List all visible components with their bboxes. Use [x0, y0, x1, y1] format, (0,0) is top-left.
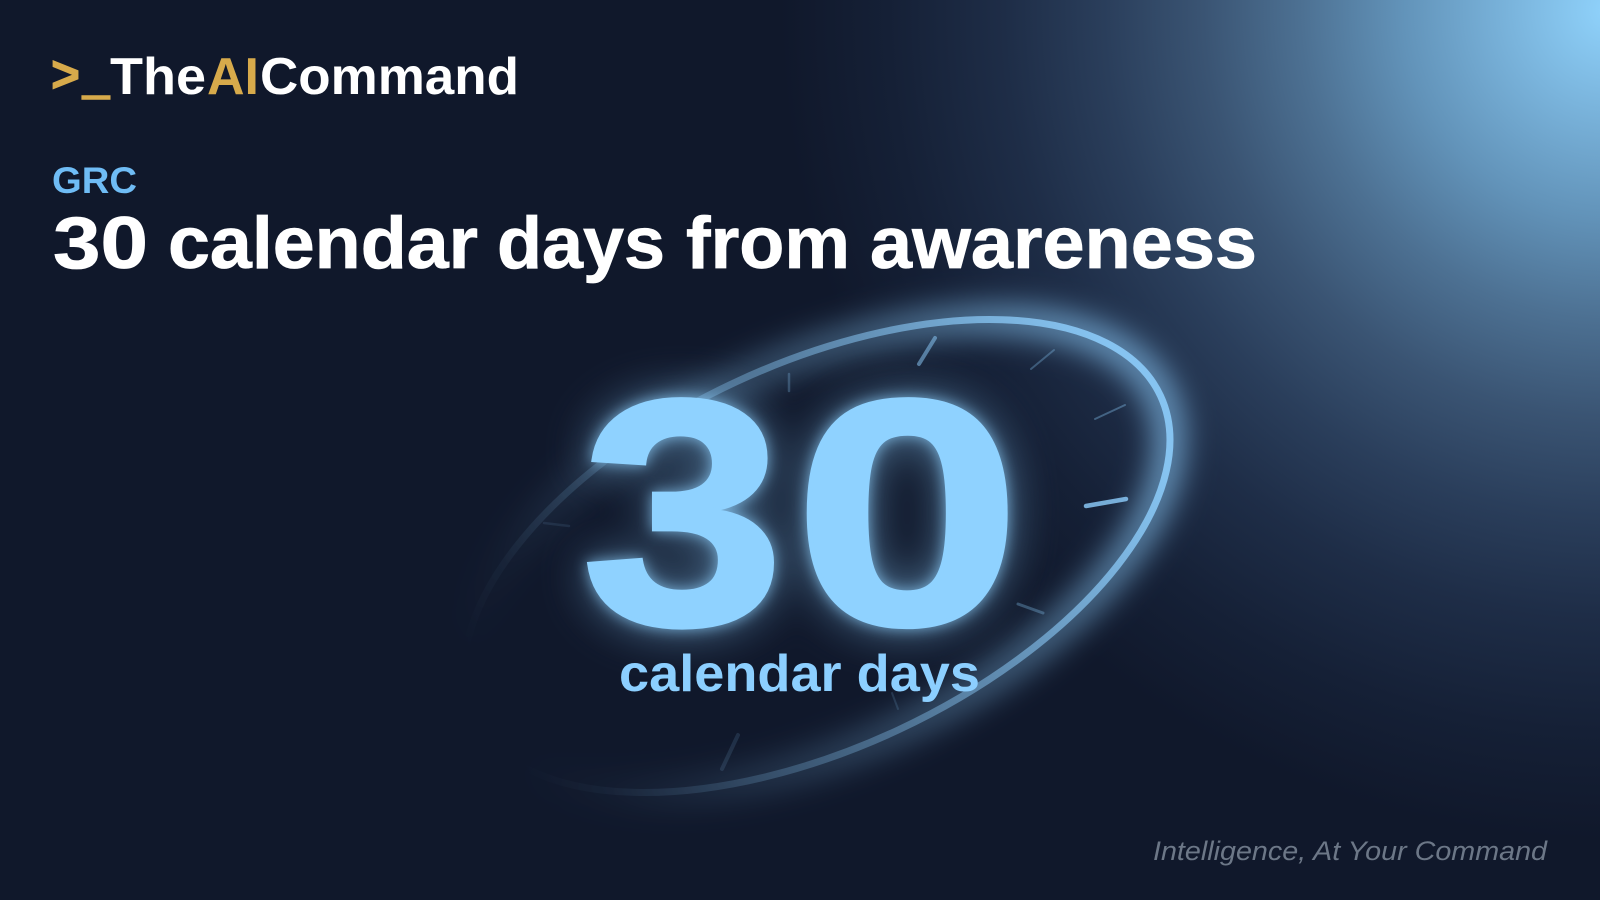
title: 30 — [53, 203, 148, 284]
logo: AI — [207, 48, 259, 106]
logo: > — [51, 46, 80, 104]
tagline: Intelligence, At Your Command — [1153, 836, 1548, 866]
ring glow — [392, 222, 1242, 890]
title — [53, 203, 1257, 284]
logo: _ — [82, 46, 110, 104]
dial ring and ticks — [392, 222, 1242, 890]
dial ticks — [544, 338, 1126, 769]
title: days — [497, 203, 665, 284]
logo: Command — [260, 48, 519, 106]
title: calendar — [168, 203, 478, 284]
big number 30: 0 — [793, 334, 1022, 693]
big number 30: 3 — [581, 334, 785, 693]
calendar days label: calendar days — [619, 645, 980, 703]
section label: GRC — [52, 160, 137, 201]
big number 30 — [581, 334, 1022, 693]
logo: The — [110, 48, 206, 106]
ring arc — [392, 222, 1242, 890]
title: awareness — [870, 203, 1257, 284]
logo — [51, 46, 519, 106]
title: from — [686, 203, 850, 284]
